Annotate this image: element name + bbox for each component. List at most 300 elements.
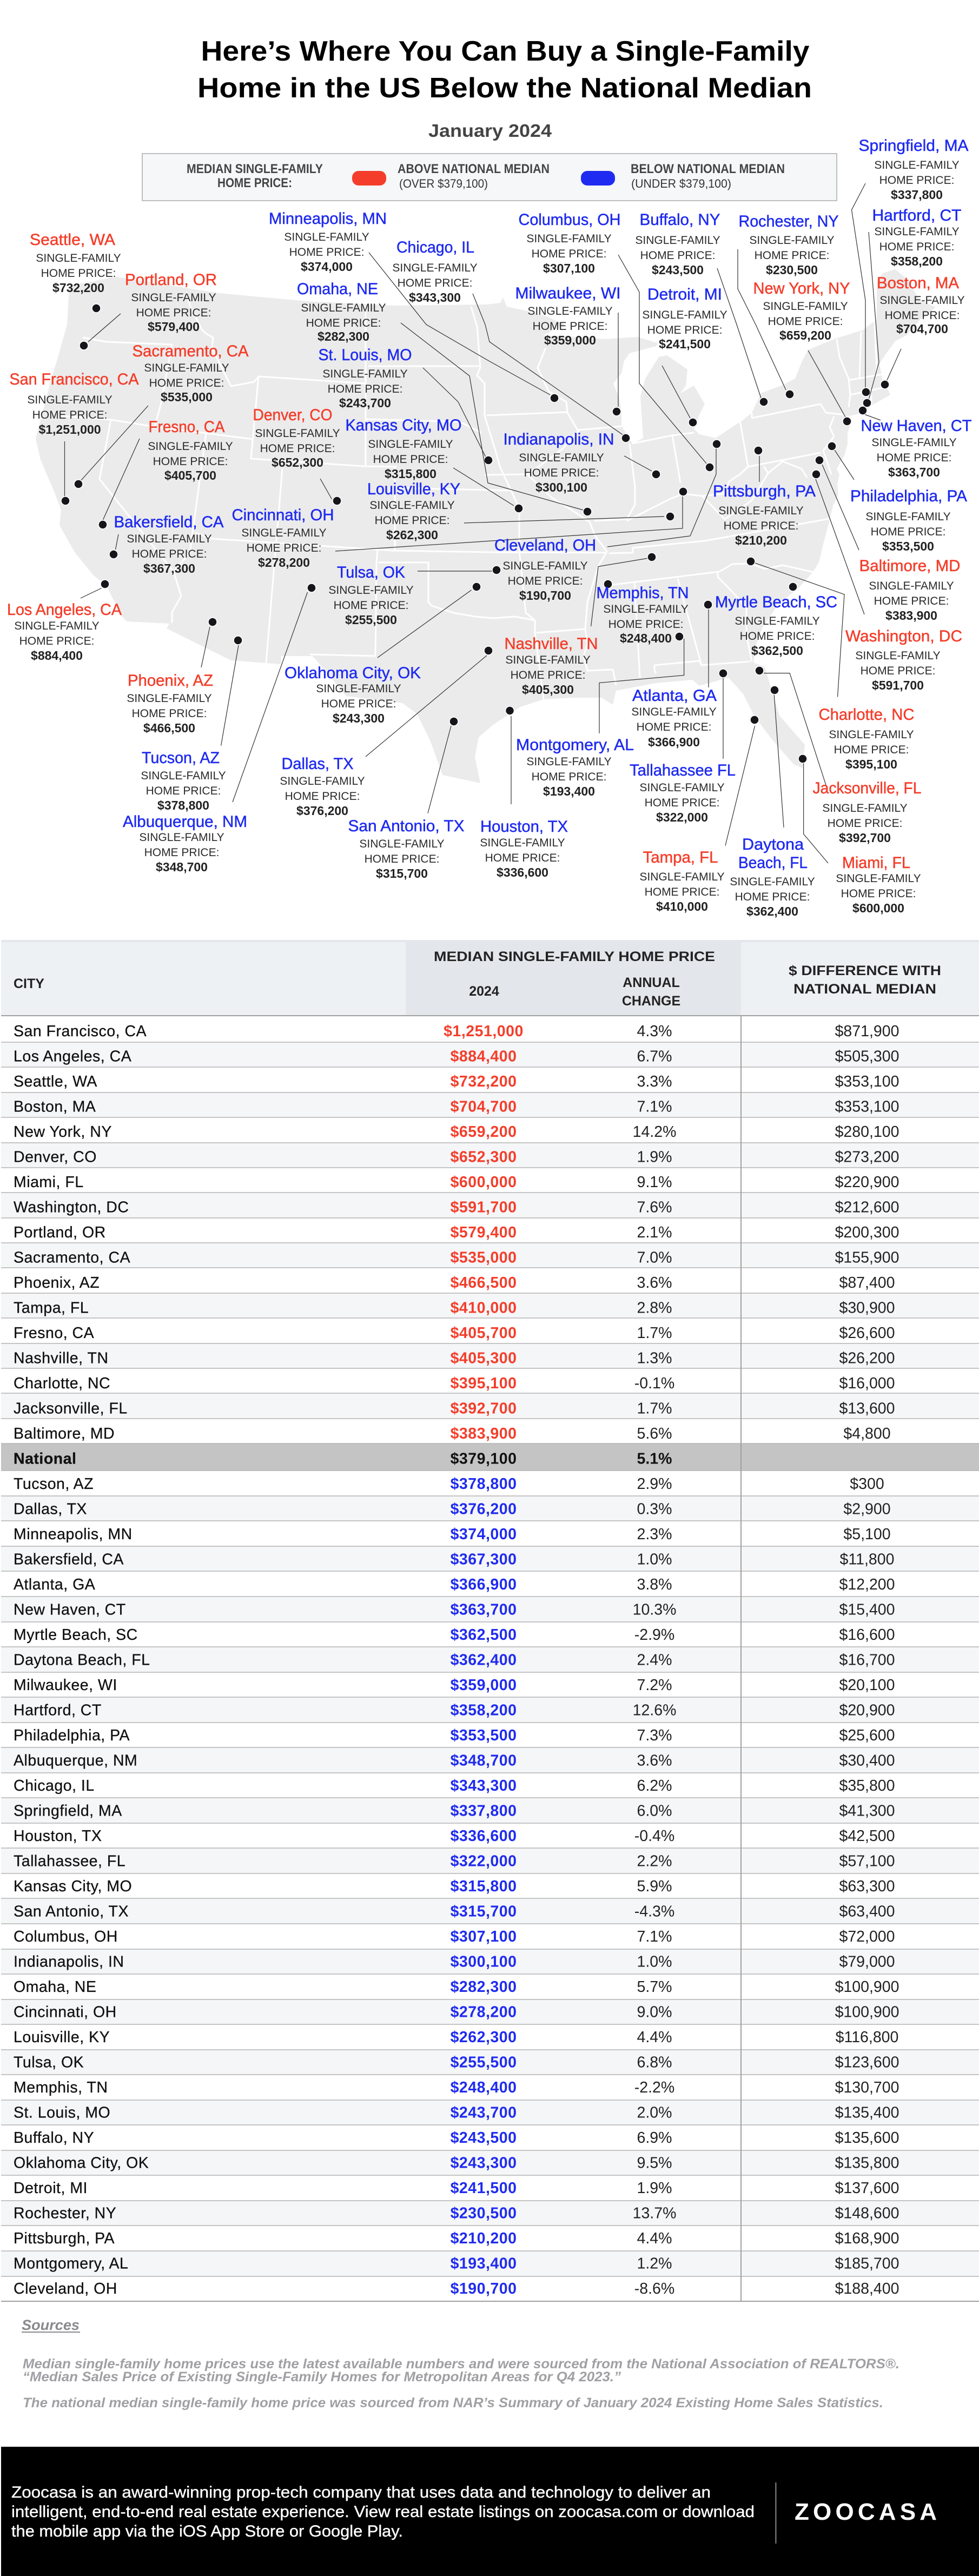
row: San Francisco <box>14 1023 899 1040</box>
label: Indianapolis, IN: Indianapolis, IN <box>503 431 614 448</box>
label: Miami, FL: $600,000 <box>852 901 904 915</box>
row: Daytona Beach <box>14 1652 895 1669</box>
label: Philadelphia, PA: SINGLE-FAMILY <box>865 511 951 523</box>
label: Minneapolis, MN: Minneapolis, MN <box>269 210 387 228</box>
label: Dallas, TX <box>280 755 365 818</box>
marker: Indianapolis <box>624 456 660 479</box>
label: Portland, OR: HOME PRICE: <box>136 307 211 319</box>
label: Kansas City, MO: $315,800 <box>385 467 436 481</box>
table header <box>1 940 979 1016</box>
marker: Jacksonville <box>755 666 826 787</box>
row: Oklahoma City: 9.5% <box>637 2155 672 2172</box>
row: Tulsa: $255,500 <box>451 2054 517 2071</box>
row: Atlanta <box>14 1576 895 1593</box>
row: San Francisco: $1,251,000 <box>444 1023 524 1040</box>
row: Minneapolis: $5,100 <box>843 1526 891 1543</box>
label: New Haven, CT <box>861 417 971 479</box>
row: Omaha: $100,900 <box>835 1978 899 1996</box>
row: Kansas City: $315,800 <box>451 1878 517 1895</box>
label: Kansas City, MO: SINGLE-FAMILY <box>368 438 453 451</box>
row: Baltimore: Baltimore, MD <box>14 1425 115 1442</box>
row: Tampa: $30,900 <box>839 1299 895 1316</box>
label: Atlanta, GA <box>631 687 717 749</box>
row: Omaha: 5.7% <box>637 1978 672 1996</box>
row: Houston: Houston, TX <box>14 1827 102 1845</box>
row: New Haven <box>14 1601 895 1618</box>
row: Milwaukee: $20,100 <box>839 1677 895 1694</box>
row: Pittsburgh: Pittsburgh, PA <box>14 2230 115 2247</box>
label: Tulsa, OK: HOME PRICE: <box>334 599 408 612</box>
label: Boston, MA <box>877 274 965 336</box>
label: Los Angeles, CA: Los Angeles, CA <box>7 601 122 619</box>
label: Springfield, MA: $337,800 <box>891 188 943 202</box>
label: Fresno, CA: $405,700 <box>164 468 216 482</box>
label: San Francisco, CA: SINGLE-FAMILY <box>27 394 113 406</box>
row: Minneapolis: $374,000 <box>451 1526 517 1543</box>
label: Nashville, TN: Nashville, TN <box>504 635 598 653</box>
label: Tampa, FL: SINGLE-FAMILY <box>639 871 725 883</box>
row: San Francisco: San Francisco, CA <box>14 1023 147 1040</box>
row: Miami: Miami, FL <box>14 1174 84 1191</box>
label: Daytona Beach, FL: Beach, FL <box>738 854 808 872</box>
label: Springfield, MA <box>859 137 968 202</box>
row: Daytona Beach: $362,400 <box>451 1652 517 1669</box>
label: Memphis, TN <box>596 584 689 645</box>
marker: Oklahoma City <box>378 582 481 658</box>
row: Fresno: Fresno, CA <box>14 1325 94 1342</box>
row: Tucson: 2.9% <box>637 1475 672 1493</box>
row: Cleveland: $190,700 <box>451 2280 517 2297</box>
row: San Antonio: San Antonio, TX <box>14 1903 129 1920</box>
label: Hartford, CT: SINGLE-FAMILY <box>874 226 960 238</box>
label: St. Louis, MO: HOME PRICE: <box>328 383 402 395</box>
row: Cleveland: -8.6% <box>634 2280 674 2297</box>
row: Columbus: 7.1% <box>637 1928 672 1945</box>
label: Milwaukee, WI: $359,000 <box>544 333 596 347</box>
label: Memphis, TN: HOME PRICE: <box>608 618 683 631</box>
row: San Francisco: 4.3% <box>637 1023 672 1040</box>
row: Myrtle Beach: $16,600 <box>839 1626 895 1644</box>
title: Here’s Where You Can Buy a Single-Family <box>201 36 810 67</box>
row: Miami: $600,000 <box>451 1174 517 1191</box>
row: Nashville: $405,300 <box>451 1350 517 1367</box>
label: Tallahassee FL <box>630 761 736 824</box>
row: Buffalo: Buffalo, NY <box>14 2129 94 2147</box>
row: Boston: 7.1% <box>637 1098 672 1115</box>
row: Phoenix: Phoenix, AZ <box>14 1274 100 1292</box>
row: Tulsa: 6.8% <box>637 2054 672 2071</box>
label: St. Louis, MO: St. Louis, MO <box>318 346 412 364</box>
label: Denver, CO: SINGLE-FAMILY <box>255 427 340 440</box>
label: San Antonio, TX: $315,700 <box>376 866 428 880</box>
marker: Boston <box>881 349 901 389</box>
row: Indianapolis: $300,100 <box>451 1953 517 1971</box>
label: Cleveland, OH: HOME PRICE: <box>508 575 583 587</box>
row: Los Angeles <box>14 1048 899 1065</box>
sources text <box>23 2356 899 2411</box>
row: Sacramento: 7.0% <box>637 1249 672 1267</box>
marker: Rochester <box>738 249 794 399</box>
row: Tulsa: Tulsa, OK <box>14 2054 84 2071</box>
label: Albuquerque, NM <box>123 813 247 874</box>
label: New Haven, CT: New Haven, CT <box>861 417 971 435</box>
row: Cincinnati: Cincinnati, OH <box>14 2003 117 2021</box>
label: Tucson, AZ: HOME PRICE: <box>146 785 221 797</box>
label: Tallahassee FL: $322,000 <box>656 810 708 824</box>
label: Myrtle Beach, SC: Myrtle Beach, SC <box>715 593 837 611</box>
label: Atlanta, GA: Atlanta, GA <box>632 687 717 705</box>
label: Houston, TX: Houston, TX <box>480 818 568 836</box>
label: Oklahoma City, OK: $243,300 <box>333 711 385 725</box>
label: New Haven, CT: HOME PRICE: <box>877 452 951 464</box>
row: Sacramento: Sacramento, CA <box>14 1249 130 1267</box>
row: Rochester <box>14 2204 899 2222</box>
marker: New Haven <box>858 406 881 420</box>
marker: Montgomery <box>599 632 684 733</box>
label: Tampa, FL: HOME PRICE: <box>645 886 719 898</box>
row: Miami: $220,900 <box>835 1174 899 1191</box>
row: Springfield: $41,300 <box>839 1802 895 1819</box>
row: New York: $659,200 <box>451 1123 517 1141</box>
label: Charlotte, NC: Charlotte, NC <box>819 706 914 724</box>
legend swatch: below national median <box>581 171 615 186</box>
row: Memphis <box>14 2079 899 2096</box>
label: Daytona Beach, FL: $362,400 <box>746 904 798 918</box>
label: Omaha, NE: HOME PRICE: <box>306 317 381 329</box>
label: Memphis, TN: Memphis, TN <box>596 584 689 602</box>
title: Home in the US Below the National Median <box>197 72 812 104</box>
row: Jacksonville: Jacksonville, FL <box>14 1400 128 1417</box>
row: Dallas: Dallas, TX <box>14 1500 87 1518</box>
legend text: above <box>398 162 550 190</box>
label: Hartford, CT <box>872 207 962 268</box>
row: Phoenix: $466,500 <box>451 1274 517 1292</box>
row: Phoenix: $87,400 <box>839 1274 895 1292</box>
label: Sacramento, CA: HOME PRICE: <box>149 377 224 389</box>
row: Memphis: -2.2% <box>634 2079 674 2096</box>
row: Daytona Beach: 2.4% <box>637 1652 672 1669</box>
label: San Antonio, TX <box>348 817 464 880</box>
marker: Milwaukee <box>612 313 621 416</box>
row: Rochester: Rochester, NY <box>14 2204 116 2222</box>
row: Columbus <box>14 1928 895 1945</box>
label: Houston, TX: $336,600 <box>497 865 548 879</box>
label: Memphis, TN: $248,400 <box>620 631 672 645</box>
label: Sacramento, CA <box>132 342 249 404</box>
row: San Antonio: $315,700 <box>451 1903 517 1920</box>
marker: Cleveland <box>607 440 721 547</box>
row: Charlotte: $16,000 <box>839 1375 895 1392</box>
row: Myrtle Beach: $362,500 <box>451 1626 517 1644</box>
row: New Haven: $363,700 <box>451 1601 517 1618</box>
row: Fresno: 1.7% <box>637 1325 672 1342</box>
row: St. Louis <box>14 2104 899 2121</box>
footer text <box>11 2484 755 2540</box>
label: Phoenix, AZ: SINGLE-FAMILY <box>127 692 212 705</box>
label: Baltimore, MD: SINGLE-FAMILY <box>869 580 954 592</box>
row: Myrtle Beach: -2.9% <box>634 1626 674 1644</box>
label: Minneapolis, MN: $374,000 <box>301 260 353 274</box>
label: Fresno, CA: Fresno, CA <box>148 418 225 436</box>
row: Montgomery: $193,400 <box>451 2255 517 2273</box>
marker: Atlanta <box>704 600 712 687</box>
sources text: The national median single-family home price was sourced from NAR’s Summary of January 2024 Existing Home Sales Statistics. <box>23 2395 883 2411</box>
label: Atlanta, GA: HOME PRICE: <box>637 721 711 733</box>
row: Albuquerque: Albuquerque, NM <box>14 1752 137 1770</box>
row: Seattle <box>14 1073 899 1090</box>
label: Tallahassee FL: SINGLE-FAMILY <box>639 782 725 794</box>
label: Los Angeles, CA: HOME PRICE: <box>19 635 94 647</box>
label: St. Louis, MO: SINGLE-FAMILY <box>322 368 408 380</box>
label: Jacksonville, FL: SINGLE-FAMILY <box>822 802 908 814</box>
legend text: above: ABOVE NATIONAL MEDIAN <box>398 162 550 176</box>
marker: Buffalo <box>717 268 768 406</box>
label: Omaha, NE: $282,300 <box>317 329 369 343</box>
row: Tallahassee: $322,000 <box>451 1853 517 1870</box>
label: Minneapolis, MN: HOME PRICE: <box>289 246 364 259</box>
label: Oklahoma City, OK: Oklahoma City, OK <box>285 664 421 682</box>
label: Oklahoma City, OK <box>285 664 421 725</box>
row: San Antonio <box>14 1903 895 1920</box>
row: Portland: $200,300 <box>835 1224 899 1241</box>
label: Daytona Beach, FL: Daytona <box>742 836 804 853</box>
row: Nashville: 1.3% <box>637 1350 672 1367</box>
footer text: Zoocasa is an award-winning prop-tech company that uses data and technology to deliver an <box>11 2484 711 2501</box>
row: Charlotte: Charlotte, NC <box>14 1375 110 1392</box>
row: Hartford: 12.6% <box>633 1701 676 1719</box>
row: Boston: $704,700 <box>451 1098 517 1115</box>
label: Washington, DC: HOME PRICE: <box>861 665 935 677</box>
label: Daytona Beach, FL: HOME PRICE: <box>735 891 810 903</box>
marker: Charlotte <box>746 557 844 697</box>
row: Milwaukee: Milwaukee, WI <box>14 1677 117 1694</box>
label: Montgomery, AL: Montgomery, AL <box>516 736 634 754</box>
row: Los Angeles: 6.7% <box>637 1048 672 1065</box>
label: Miami, FL: Miami, FL <box>842 854 910 872</box>
row: Omaha <box>14 1978 899 1996</box>
label: Philadelphia, PA: Philadelphia, PA <box>850 487 967 505</box>
row: Charlotte: $395,100 <box>451 1375 517 1392</box>
label: Buffalo, NY: Buffalo, NY <box>639 211 720 229</box>
legend swatch: above national median <box>352 171 386 186</box>
label: Jacksonville, FL <box>812 779 922 845</box>
label: Boston, MA: Boston, MA <box>877 274 959 292</box>
row: Atlanta: $366,900 <box>451 1576 517 1593</box>
label: New York, NY: $659,200 <box>779 328 831 342</box>
label: Seattle, WA: Seattle, WA <box>30 231 115 249</box>
row: Omaha: Omaha, NE <box>14 1978 96 1996</box>
marker: Sacramento <box>74 406 148 488</box>
label: Sacramento, CA: $535,000 <box>161 390 213 404</box>
row: New York: New York, NY <box>14 1123 112 1141</box>
label: Springfield, MA: HOME PRICE: <box>879 174 954 187</box>
label: Detroit, MI: SINGLE-FAMILY <box>642 309 727 321</box>
row: Springfield: $337,800 <box>451 1802 517 1819</box>
row: Washington: $591,700 <box>451 1198 517 1216</box>
label: Los Angeles, CA: $884,400 <box>31 648 83 663</box>
header: difference: NATIONAL MEDIAN <box>793 982 936 997</box>
marker: Tucson <box>221 636 242 746</box>
header: annual change: ANNUAL <box>623 975 680 990</box>
marker: Detroit <box>662 366 697 427</box>
row: Detroit: $137,600 <box>835 2180 899 2197</box>
row: Oklahoma City <box>14 2155 899 2172</box>
row: Bakersfield: $367,300 <box>451 1551 517 1568</box>
row: Indianapolis: Indianapolis, IN <box>14 1953 124 1971</box>
label: Atlanta, GA: $366,900 <box>648 735 700 749</box>
label: Minneapolis, MN <box>269 210 387 274</box>
label: Dallas, TX: SINGLE-FAMILY <box>280 775 365 787</box>
label: Chicago, IL: Chicago, IL <box>396 239 474 256</box>
label: Portland, OR: SINGLE-FAMILY <box>131 292 216 304</box>
row: Milwaukee <box>14 1677 895 1694</box>
label: Sacramento, CA: Sacramento, CA <box>132 342 249 360</box>
label: Detroit, MI: HOME PRICE: <box>647 324 722 336</box>
row: Pittsburgh: $168,900 <box>835 2230 899 2247</box>
legend title <box>187 162 323 190</box>
row: Portland <box>14 1224 899 1241</box>
city labels <box>7 137 971 918</box>
label: Tucson, AZ <box>141 749 226 812</box>
row: Indianapolis: 1.0% <box>637 1953 672 1971</box>
row: Nashville: $26,200 <box>839 1350 895 1367</box>
label: Dallas, TX: $376,200 <box>296 804 348 818</box>
label: New York, NY: HOME PRICE: <box>768 315 843 328</box>
header: difference: $ DIFFERENCE WITH <box>789 963 941 978</box>
footer text: the mobile app via the iOS App Store or Google Play. <box>11 2522 403 2540</box>
label: Albuquerque, NM: Albuquerque, NM <box>123 813 247 831</box>
marker: Memphis <box>604 580 612 588</box>
label: Louisville, KY: $262,300 <box>386 528 438 542</box>
label: Springfield, MA: Springfield, MA <box>859 137 968 155</box>
label: San Antonio, TX: SINGLE-FAMILY <box>359 838 445 850</box>
label: Tulsa, OK: Tulsa, OK <box>337 564 405 581</box>
row: Boston <box>14 1098 899 1115</box>
label: Myrtle Beach, SC: HOME PRICE: <box>740 630 815 643</box>
label: Houston, TX <box>480 818 568 879</box>
row: Detroit: 1.9% <box>637 2180 672 2197</box>
label: Oklahoma City, OK: SINGLE-FAMILY <box>316 683 401 695</box>
label: Tucson, AZ: $378,800 <box>157 798 209 812</box>
row: Philadelphia: $353,500 <box>451 1727 517 1744</box>
marker: Minneapolis <box>369 253 559 402</box>
label: Philadelphia, PA: $353,500 <box>882 539 934 553</box>
row: Albuquerque: 3.6% <box>637 1752 672 1770</box>
label: Cincinnati, OH: SINGLE-FAMILY <box>241 527 327 539</box>
label: Denver, CO: Denver, CO <box>253 406 332 424</box>
row: Denver: $652,300 <box>451 1149 517 1166</box>
row: Montgomery <box>14 2255 899 2273</box>
label: Daytona Beach, FL <box>730 836 815 918</box>
label: Omaha, NE: SINGLE-FAMILY <box>301 302 386 314</box>
label: Tucson, AZ: SINGLE-FAMILY <box>141 770 226 782</box>
label: Los Angeles, CA <box>7 601 122 663</box>
marker: Omaha <box>401 323 592 516</box>
legend title: MEDIAN SINGLE-FAMILY <box>187 162 323 176</box>
label: Indianapolis, IN: SINGLE-FAMILY <box>519 452 604 464</box>
row: New Haven: $15,400 <box>839 1601 895 1618</box>
label: Jacksonville, FL: Jacksonville, FL <box>812 779 922 797</box>
row: Montgomery: Montgomery, AL <box>14 2255 128 2273</box>
row: Tallahassee: 2.2% <box>637 1853 672 1870</box>
row: Detroit: Detroit, MI <box>14 2180 88 2197</box>
label: Rochester, NY <box>739 213 838 277</box>
label: Detroit, MI: $241,500 <box>659 337 711 351</box>
row: Myrtle Beach <box>14 1626 895 1644</box>
label: Louisville, KY: SINGLE-FAMILY <box>369 499 455 512</box>
row: Phoenix: 3.6% <box>637 1274 672 1292</box>
row: Daytona Beach: Daytona Beach, FL <box>14 1652 150 1669</box>
marker: Kansas City <box>453 468 523 513</box>
row: Detroit <box>14 2180 899 2197</box>
label: New York, NY: New York, NY <box>753 280 850 297</box>
label: Rochester, NY: $230,500 <box>766 263 818 277</box>
label: Denver, CO: HOME PRICE: <box>260 442 335 455</box>
label: Seattle, WA <box>30 231 121 295</box>
row: Atlanta: $12,200 <box>839 1576 895 1593</box>
label: Kansas City, MO: Kansas City, MO <box>345 416 462 434</box>
row: Fresno: $26,600 <box>839 1325 895 1342</box>
label: Portland, OR: $579,400 <box>148 320 200 334</box>
label: Atlanta, GA: SINGLE-FAMILY <box>631 706 717 718</box>
row: Atlanta: Atlanta, GA <box>14 1576 95 1593</box>
label: Cincinnati, OH <box>231 506 334 569</box>
row: Seattle: 3.3% <box>637 1073 672 1090</box>
label: Bakersfield, CA: HOME PRICE: <box>132 548 207 560</box>
label: Milwaukee, WI: HOME PRICE: <box>533 320 607 333</box>
row: Miami: 9.1% <box>637 1174 672 1191</box>
row: Kansas City <box>14 1878 895 1895</box>
row: Sacramento <box>14 1249 899 1267</box>
label: San Francisco, CA <box>10 370 138 436</box>
label: Miami, FL: SINGLE-FAMILY <box>836 872 921 885</box>
map: United States silhouette <box>36 269 936 783</box>
sources text: Median single-family home prices use the latest available numbers and were sourced from the National Association of REALTORS®. <box>23 2356 899 2372</box>
marker: Cincinnati <box>335 487 687 551</box>
marker: Nashville <box>591 553 656 626</box>
label: Buffalo, NY: HOME PRICE: <box>640 249 715 262</box>
row: Albuquerque: $30,400 <box>839 1752 895 1770</box>
label: Baltimore, MD: $383,900 <box>885 608 937 623</box>
marker: Los Angeles <box>81 580 109 598</box>
row: Daytona Beach: $16,700 <box>839 1652 895 1669</box>
row: Washington: 7.6% <box>637 1198 672 1216</box>
row: Cleveland: Cleveland, OH <box>14 2280 117 2297</box>
label: Fresno, CA: HOME PRICE: <box>153 455 228 468</box>
row: Houston: $42,500 <box>839 1827 895 1845</box>
row: Phoenix <box>14 1274 895 1292</box>
marker: Houston <box>505 706 514 804</box>
row: Cincinnati: $278,200 <box>451 2003 517 2021</box>
row: Nashville: Nashville, TN <box>14 1350 108 1367</box>
row: San Antonio: $63,400 <box>839 1903 895 1920</box>
label: Tampa, FL: $410,000 <box>656 899 708 913</box>
label: Albuquerque, NM: HOME PRICE: <box>144 846 219 859</box>
row: Bakersfield: Bakersfield, CA <box>14 1551 124 1568</box>
label: Daytona Beach, FL: SINGLE-FAMILY <box>730 876 815 888</box>
row: Portland: $579,400 <box>451 1224 517 1241</box>
label: Buffalo, NY <box>635 211 720 277</box>
row: Minneapolis <box>14 1526 891 1543</box>
row: Hartford: Hartford, CT <box>14 1701 102 1719</box>
label: Hartford, CT: HOME PRICE: <box>879 241 954 253</box>
row: Fresno: $405,700 <box>451 1325 517 1342</box>
marker: Portland <box>80 314 121 350</box>
row: Indianapolis: $79,000 <box>839 1953 895 1971</box>
label: Cleveland, OH <box>494 537 596 602</box>
marker: Hartford <box>863 232 879 407</box>
label: Houston, TX: SINGLE-FAMILY <box>480 837 565 849</box>
